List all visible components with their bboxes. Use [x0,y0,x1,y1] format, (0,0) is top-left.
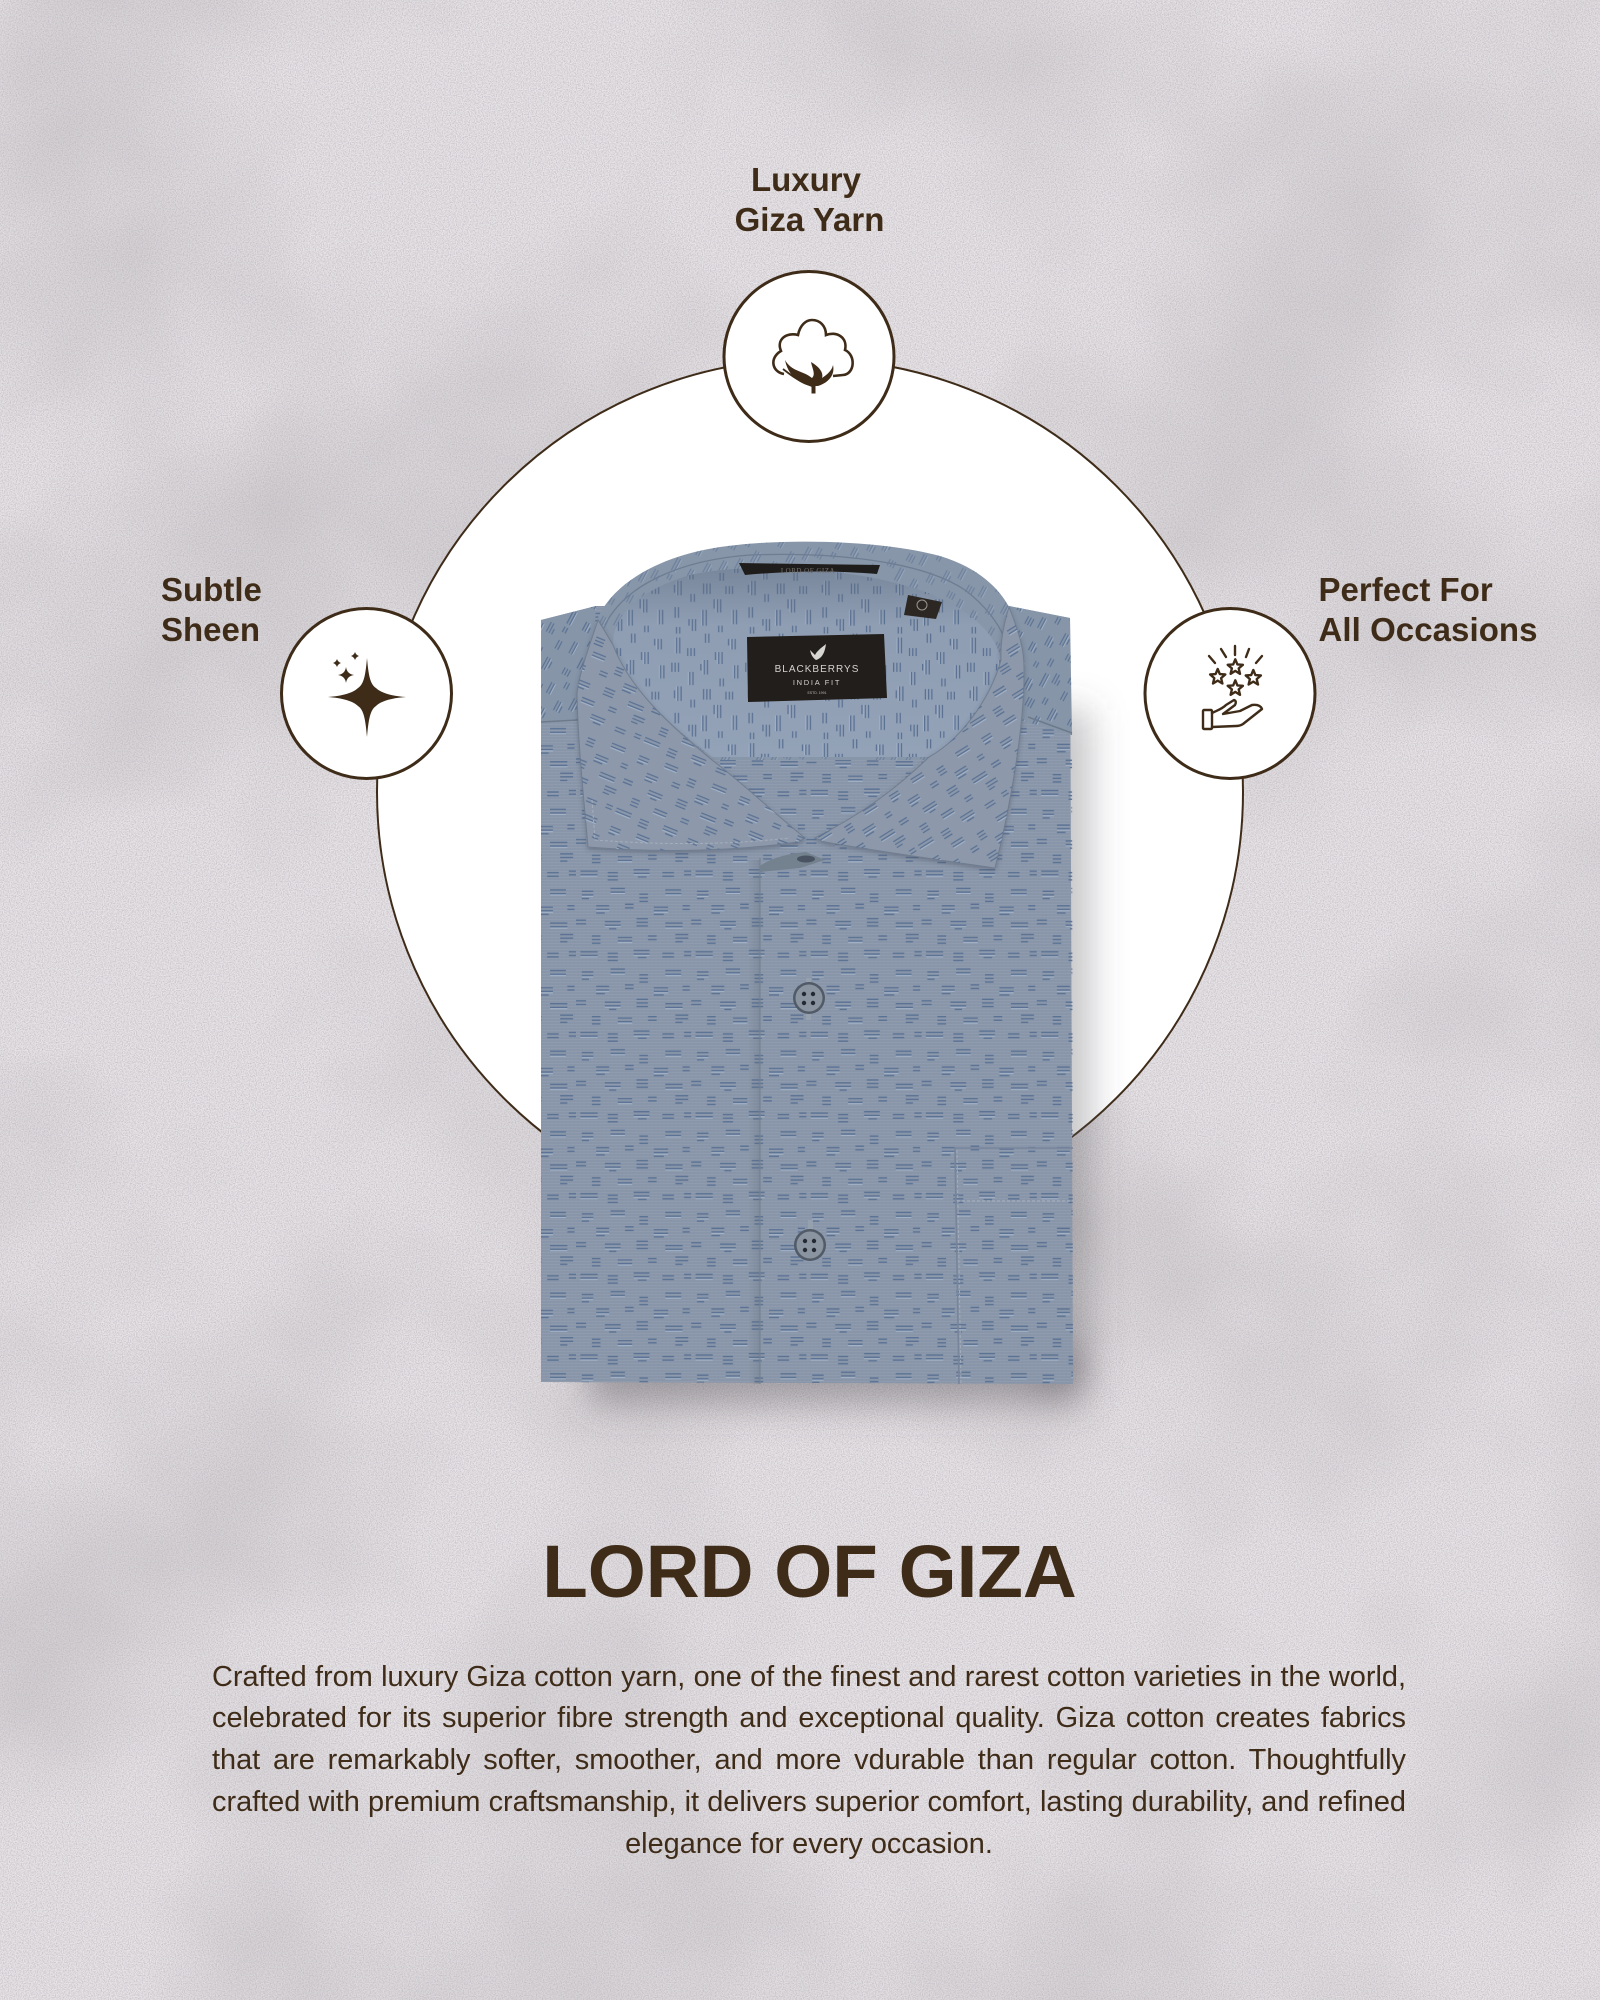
label: Perfect For All Occasions: Perfect For [1318,571,1493,608]
icon: hand with stars [1203,646,1262,729]
shoulder sleeves [541,606,1072,735]
placket fold [748,858,760,1384]
shirt shadow [590,710,1090,1405]
left collar leaf [577,620,805,851]
label: Perfect For All Occasions [1318,571,1538,648]
label: Subtle Sheen [161,571,262,648]
icon: cotton boll [773,320,853,394]
brand label: ESTD. 1991 [807,691,827,695]
label: Luxury Giza Yarn [735,161,884,238]
pocket [955,1148,1073,1384]
left feature: sparkle badge [282,608,452,778]
inner collar [605,554,1005,757]
top feature: cotton badge [724,272,894,442]
description paragraph: crafted with premium craftsmanship, it delivers superior comfort, lasting durability, and refined [212,1786,1406,1818]
lower button [794,1220,826,1261]
upper button [793,978,825,1020]
collar back band [598,542,1018,760]
size tag [904,595,942,619]
brand label [747,634,887,702]
description paragraph: celebrated for its superior fibre strength and exceptional quality. Giza cotton creates fabrics [212,1702,1406,1734]
label: Luxury Giza Yarn: Luxury [751,161,862,198]
label: Subtle Sheen: Subtle [161,571,262,608]
shirt body [541,606,1073,1384]
right feature: occasions badge [1145,608,1315,778]
description paragraph: Crafted from luxury Giza cotton yarn, one of the finest and rarest cotton varieties in the world, [212,1660,1406,1692]
neck tape [739,563,880,575]
icon: sparkle stars [328,652,406,737]
brand label: BLACKBERRYS [775,664,859,675]
label: Subtle Sheen: Sheen [161,611,260,648]
title: LORD OF GIZA [542,1529,1077,1613]
collar button band [760,852,825,872]
neck tape: LORD OF GIZA [781,567,835,575]
large white circle behind shirt [377,359,1243,1225]
label: Perfect For All Occasions: All Occasions [1318,611,1538,648]
right collar leaf [815,607,1024,868]
description paragraph: that are remarkably softer, smoother, and more vdurable than regular cotton. Thoughtfully [212,1744,1406,1776]
label: Luxury Giza Yarn: Giza Yarn [735,201,884,238]
folded shirt [541,542,1073,1384]
description paragraph: elegance for every occasion. [625,1828,993,1860]
brand label: INDIA FIT [793,678,841,687]
